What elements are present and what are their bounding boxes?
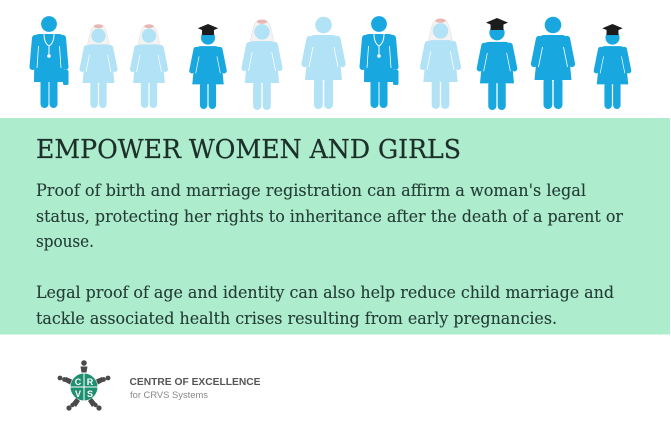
icon: bride 4: [423, 19, 458, 109]
icon: doctor woman 2: [362, 16, 398, 108]
heading: EMPOWER WOMEN AND GIRLS: [36, 134, 461, 165]
logo: CRVS emblem: [58, 360, 110, 411]
logo: CRVS emblem: C: [75, 377, 82, 387]
logo: CRVS emblem: V: [75, 389, 81, 399]
icon: bride 1: [82, 24, 115, 108]
logo: CRVS emblem: R: [87, 377, 94, 387]
logo text: organisation name: [130, 376, 260, 400]
text block: first paragraph: [36, 180, 624, 251]
text block: first paragraph: Proof of birth and marriage registration can affirm a woman's legal: [36, 180, 586, 200]
text block: second paragraph: [36, 282, 614, 328]
panel: green message band: [0, 118, 670, 334]
row of women icons: [32, 16, 629, 110]
icon: plain blue woman: [534, 17, 572, 109]
icon: bride 2: [133, 24, 165, 108]
icon: graduate woman 1: [192, 24, 224, 109]
icon: plain pale woman: [304, 17, 342, 109]
text block: second paragraph: Legal proof of age and identity can also help reduce child marriage and: [36, 282, 614, 302]
icon: bride 3: [244, 20, 280, 110]
icon: graduate woman 2: [480, 18, 514, 110]
logo text: organisation name: for CRVS Systems: [130, 390, 209, 400]
text block: second paragraph: tackle associated health crises resulting from early pregnancies.: [36, 308, 557, 328]
logo text: organisation name: CENTRE OF EXCELLENCE: [130, 376, 260, 388]
logo: CRVS emblem: S: [87, 389, 93, 399]
text block: first paragraph: status, protecting her rights to inheritance after the death of a parent or: [36, 206, 624, 226]
icon: doctor woman 1: [32, 16, 68, 108]
icon: graduate woman 3: [596, 24, 629, 109]
text block: first paragraph: spouse.: [36, 231, 94, 251]
